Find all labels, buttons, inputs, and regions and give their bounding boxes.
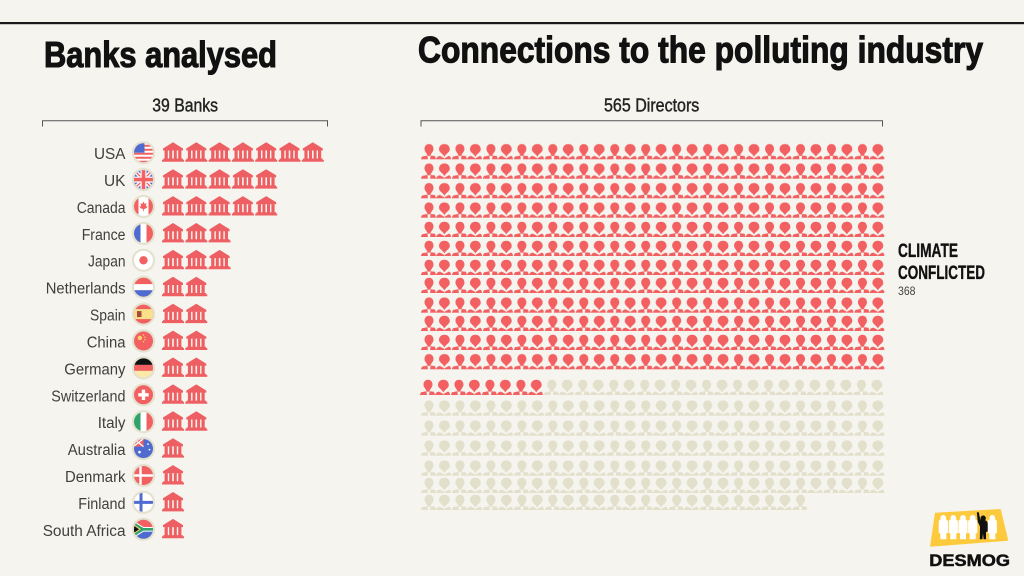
- callout: climate conflicted 368: [898, 241, 985, 298]
- callout: climate conflicted 368: CONFLICTED: [898, 263, 985, 284]
- flag: Spain: [132, 302, 155, 326]
- flag: South Africa: [132, 518, 155, 541]
- banks: 1: [162, 438, 184, 458]
- flag: Netherlands: [132, 276, 155, 299]
- row: USA: [94, 141, 324, 164]
- row: Australia: Australia: [68, 442, 126, 459]
- row: USA: USA: [94, 146, 126, 163]
- row: Switzerland: Switzerland: [51, 388, 125, 406]
- row: South Africa: South Africa: [43, 523, 126, 540]
- flag: Germany: [132, 356, 155, 380]
- row: China: [87, 329, 207, 353]
- row: Denmark: [65, 464, 184, 487]
- callout: climate conflicted 368: CLIMATE: [898, 241, 958, 262]
- banks: 2: [162, 331, 207, 350]
- row: China: China: [87, 334, 126, 352]
- row: France: France: [82, 227, 126, 244]
- row: Canada: [77, 195, 277, 218]
- row: France: [82, 222, 231, 245]
- row: Switzerland: [51, 383, 207, 406]
- chart: directors pictogram grid: [419, 143, 884, 511]
- flag: USA: [132, 141, 155, 164]
- banks: 7: [162, 142, 324, 162]
- banks: 2: [162, 304, 207, 323]
- flag: UK: [132, 168, 155, 191]
- flag: Switzerland: [132, 383, 155, 406]
- row: Netherlands: Netherlands: [46, 280, 126, 298]
- row: UK: [104, 168, 277, 191]
- bracket: directors: [421, 121, 882, 126]
- row: Spain: Spain: [90, 308, 126, 324]
- row: Denmark: Denmark: [65, 469, 126, 486]
- row: Germany: Germany: [64, 362, 126, 378]
- banks: 3: [162, 250, 231, 269]
- bracket: banks: [42, 121, 328, 126]
- row: Australia: [68, 437, 184, 460]
- flag: China: [132, 329, 155, 353]
- row: UK: UK: [104, 173, 126, 190]
- row: Japan: [88, 249, 231, 272]
- row: Japan: Japan: [88, 254, 126, 270]
- callout: climate conflicted 368: 368: [898, 284, 916, 298]
- banks: 5: [162, 169, 277, 189]
- row: Spain: [90, 302, 207, 326]
- banks: 2: [162, 277, 207, 296]
- heading: banks analysed: Banks analysed: [44, 34, 277, 75]
- row: South Africa: [43, 518, 184, 541]
- flag: Japan: [132, 249, 155, 272]
- panel: banks by country: [43, 141, 324, 541]
- banks: 1: [162, 519, 184, 538]
- banks: 1: [162, 492, 184, 511]
- flag: Finland: [132, 491, 155, 514]
- row: Netherlands: [46, 276, 207, 299]
- logo: Desmog: [929, 509, 1010, 570]
- row: Finland: [78, 491, 184, 514]
- banks: 3: [162, 223, 231, 242]
- banks: 1: [162, 465, 184, 484]
- banks: 5: [162, 196, 277, 216]
- subheading: 565 directors: 565 Directors: [604, 96, 699, 116]
- banks: 2: [162, 358, 207, 377]
- logo: Desmog: DESMOG: [929, 552, 1010, 570]
- banks: 2: [162, 411, 207, 431]
- flag: Denmark: [132, 464, 155, 487]
- top rule: [0, 22, 1024, 24]
- flag: Italy: [132, 410, 155, 433]
- flag: France: [132, 222, 155, 245]
- row: Finland: Finland: [78, 496, 126, 513]
- subheading: 39 banks: 39 Banks: [152, 96, 218, 116]
- row: Italy: [98, 410, 207, 433]
- row: Italy: Italy: [98, 415, 126, 432]
- banks: 2: [162, 384, 207, 404]
- flag: Canada: [132, 195, 155, 218]
- row: Germany: [64, 356, 207, 380]
- row: Canada: Canada: [77, 200, 126, 217]
- flag: Australia: [132, 437, 155, 460]
